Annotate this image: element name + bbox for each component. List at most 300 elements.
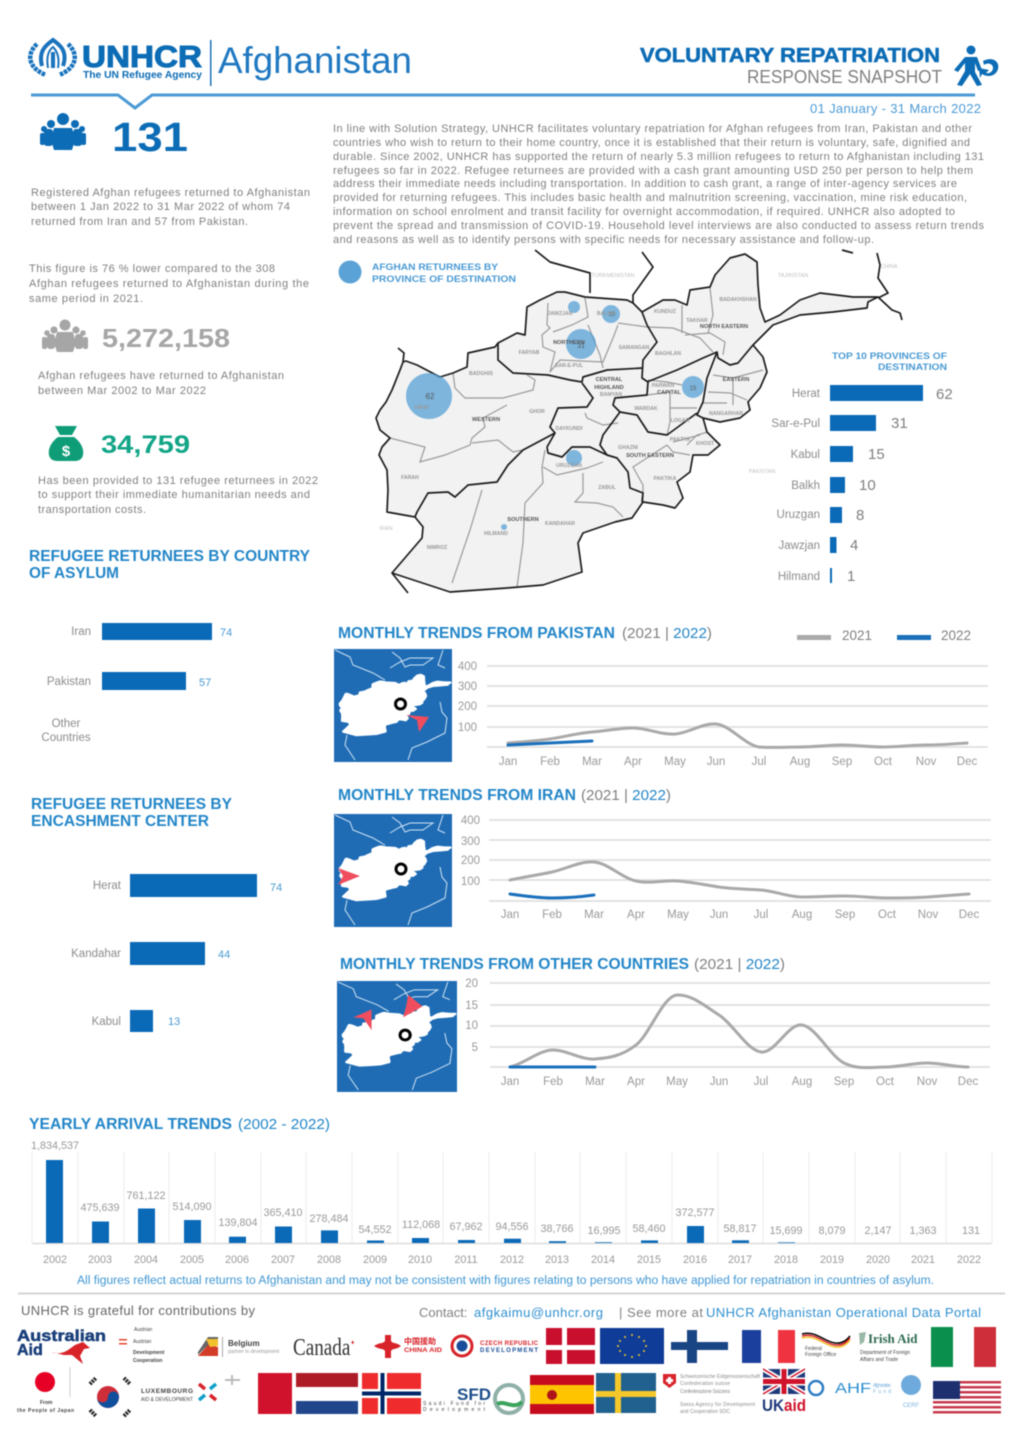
bar chart: returnees by country of asylum: Iran	[71, 626, 91, 638]
region and province labels	[379, 264, 898, 551]
footer: contact and portal links	[419, 1305, 981, 1320]
bar chart: yearly arrivals: 2012	[500, 1254, 524, 1266]
icon: money bag: $	[62, 443, 71, 460]
text block: year on year comparison: Afghan refugees returned to Afghanistan during the	[29, 278, 309, 290]
logo: Luxembourg: LUXEMBOURG	[141, 1388, 193, 1395]
note: data caveat: All figures reflect actual returns to Afghanistan and may not be consistent with figures relating to persons who have applied for repatriation in countries of asylum.	[77, 1275, 934, 1287]
line chart: Pakistan monthly	[458, 661, 988, 768]
bar chart: yearly arrivals: 2008	[317, 1254, 341, 1266]
line chart: other countries monthly: Nov	[917, 1076, 937, 1088]
line chart: Pakistan monthly: Dec	[957, 756, 977, 768]
line chart: Iran monthly: Dec	[959, 909, 979, 921]
line chart: Iran monthly: 400	[461, 815, 480, 827]
map: Afghan returnees by province: 10	[609, 312, 616, 318]
line chart: Pakistan monthly: 100	[458, 722, 477, 734]
logo: Irish Aid: Irish Aid	[868, 1331, 918, 1346]
heading: trends from Pakistan: (2021 | 2022)	[622, 626, 712, 642]
region and province labels: SAMANGAN	[619, 345, 650, 351]
footer: contact and portal links: UNHCR Afghanistan Operational Data Portal	[706, 1305, 981, 1320]
line chart: Iran monthly: 300	[461, 836, 480, 848]
key figure: 131 returnees: 131	[112, 114, 188, 160]
text block: intro paragraph: refugees so far in 2022. Refugee returnees are provided with a cash grant amounting USD 250 per person to help them	[333, 165, 973, 177]
region and province labels: NANGARHAR	[709, 411, 743, 417]
line chart: Pakistan monthly: 400	[458, 661, 477, 673]
province bubbles	[406, 301, 704, 530]
region and province labels: KANDAHAR	[545, 521, 575, 527]
icon: walking person with return arrow	[954, 46, 998, 86]
logo: Irish Aid: Department of Foreign	[860, 1350, 910, 1356]
icon: people group (grey)	[42, 320, 88, 352]
bar chart: top provinces of destination: 62	[936, 386, 953, 403]
flag: Norway	[362, 1373, 421, 1414]
region and province labels: DAYKUNDI	[556, 426, 583, 432]
line chart: other countries monthly: Mar	[585, 1076, 605, 1088]
line chart: other countries monthly: 20	[465, 978, 478, 990]
chart legend: 2022	[941, 628, 971, 643]
bar chart: yearly arrivals: 139,804	[218, 1217, 258, 1229]
line chart: other countries monthly: Jul	[754, 1076, 768, 1088]
flag: Denmark	[546, 1328, 595, 1364]
footer: contributions heading: UNHCR is grateful for contributions by	[21, 1303, 256, 1318]
region and province labels: GHAZNI	[618, 445, 638, 451]
logo: Switzerland	[663, 1374, 761, 1415]
bar chart: yearly arrivals: 2,147	[864, 1225, 892, 1237]
text block: intro paragraph	[333, 123, 984, 246]
footer: contact and portal links: Contact:	[419, 1305, 467, 1320]
icon: UNHCR emblem	[30, 40, 75, 75]
region and province labels: TAJIKISTAN	[778, 273, 808, 279]
chart legend	[797, 628, 971, 643]
logo: China aid	[374, 1335, 443, 1358]
logo: Japan	[17, 1367, 74, 1414]
region and province labels: PARWAN	[652, 383, 675, 389]
heading: returnees by encashment center: REFUGEE RETURNEES BY	[31, 796, 233, 813]
line chart: Pakistan monthly: Oct	[874, 756, 893, 768]
bar chart: yearly arrivals: 2007	[271, 1254, 295, 1266]
bar chart: yearly arrivals: 2018	[774, 1254, 798, 1266]
line chart: other countries monthly: Feb	[543, 1076, 563, 1088]
bar chart: returnees by encashment center: Kabul	[92, 1016, 121, 1028]
bar chart: top provinces of destination	[771, 351, 953, 585]
text block: intro paragraph: and reasons as well as to identify persons with specific needs for necessary assistance and follow-up.	[333, 234, 874, 246]
logo: Austrian Development Cooperation: Cooperation	[133, 1358, 162, 1364]
logo: Japan: From	[40, 1400, 53, 1406]
region and province labels: HILMAND	[484, 531, 508, 537]
bar chart: returnees by country of asylum: Other	[52, 718, 81, 730]
bar chart: yearly arrivals: 2010	[408, 1254, 432, 1266]
line chart: Pakistan monthly: 200	[458, 701, 477, 713]
region and province labels: EASTERN	[723, 377, 749, 383]
flag: Netherlands	[296, 1373, 358, 1414]
region and province labels: IRAN	[379, 526, 393, 532]
line chart: other countries monthly: Jan	[501, 1076, 519, 1088]
region and province labels: NORTHERN	[553, 340, 585, 346]
line chart: Iran monthly: 200	[461, 855, 480, 867]
logo: Canada: ✦	[350, 1339, 355, 1347]
donor logos row 1	[17, 1327, 996, 1367]
text block: cash grant description: to support their immediate humanitarian needs and	[38, 489, 310, 501]
bar chart: yearly arrivals: 278,484	[309, 1213, 349, 1225]
region and province labels: BALKH	[597, 311, 615, 317]
bar chart: yearly arrivals: 58,460	[632, 1223, 666, 1235]
logo: UK aid	[762, 1369, 806, 1415]
bar chart: yearly arrivals: 2022	[957, 1254, 981, 1266]
bar chart: top provinces of destination: Uruzgan	[777, 509, 820, 521]
divider	[210, 40, 212, 86]
region and province labels: SAR-E-PUL	[555, 363, 584, 369]
line chart: Pakistan monthly: May	[664, 756, 686, 768]
map: Afghan returnees by province: 31	[577, 343, 585, 350]
line chart: Pakistan monthly: Jun	[707, 756, 725, 768]
logo: Belgium: Belgium	[228, 1339, 260, 1348]
region and province labels: BADGHIS	[469, 371, 494, 377]
logo: humanitarian agency: CZECH REPUBLIC	[480, 1341, 539, 1347]
logo: Austrian Development Cooperation: Development	[133, 1350, 165, 1356]
bar chart: returnees by encashment center: 74	[270, 882, 282, 894]
bar chart: returnees by country of asylum	[41, 623, 232, 744]
logo: Australian Aid	[17, 1328, 106, 1364]
region and province labels: LOGAR	[671, 418, 690, 424]
bar chart: returnees by encashment center: Kandahar	[71, 948, 121, 960]
region and province labels: ZABUL	[598, 485, 617, 491]
logo: Saudi Fund for Development: Development	[423, 1407, 486, 1413]
logo: Saudi Fund for Development: SFD	[457, 1385, 491, 1404]
flag: European Union	[600, 1328, 664, 1364]
bar chart: top provinces of destination: Jawzjan	[778, 540, 820, 552]
heading: trends from Pakistan: MONTHLY TRENDS FROM PAKISTAN	[338, 625, 615, 642]
region and province labels: NIMROZ	[427, 545, 448, 551]
line chart: Pakistan monthly: Jan	[499, 756, 517, 768]
logo: Germany: Foreign Office	[805, 1352, 837, 1358]
line chart: Iran monthly: Oct	[878, 909, 897, 921]
bar chart: yearly arrivals: 2013	[545, 1254, 569, 1266]
heading: top provinces	[832, 351, 947, 373]
heading: yearly arrival trends: (2002 - 2022)	[238, 1117, 330, 1133]
bar chart: top provinces of destination: 31	[891, 415, 908, 432]
region and province labels: JAWZJAN	[548, 311, 573, 317]
text block: total returns description	[38, 370, 284, 397]
line chart: Iran monthly: Jan	[501, 909, 519, 921]
heading: returnees by country of asylum: REFUGEE RETURNEES BY COUNTRY	[29, 548, 311, 565]
line chart: Pakistan monthly: Apr	[624, 756, 642, 768]
line chart: other countries monthly: Oct	[876, 1076, 895, 1088]
region and province labels: HIGHLAND	[594, 385, 624, 391]
heading: top provinces: TOP 10 PROVINCES OF	[832, 351, 947, 362]
logo: Switzerland: Schweizerische Eidgenossenschaft	[680, 1374, 761, 1380]
logo: Switzerland: Swiss Agency for Development	[680, 1402, 756, 1408]
bar chart: yearly arrivals: 67,962	[449, 1221, 483, 1233]
donor logos row 2	[17, 1367, 1001, 1416]
text block: returnees description: returned from Iran and 57 from Pakistan.	[31, 216, 248, 228]
region and province labels: BAMYAN	[600, 392, 622, 398]
logo: Germany: Federal	[805, 1346, 822, 1352]
bar chart: top provinces of destination: Kabul	[791, 449, 820, 461]
line chart: Iran monthly	[461, 815, 991, 921]
heading: voluntary repatriation: VOLUNTARY REPATRIATION	[640, 45, 940, 67]
bar chart: top provinces of destination: 10	[859, 477, 876, 494]
logo: Saudi Fund for Development	[423, 1385, 523, 1413]
flag: France	[742, 1330, 795, 1363]
heading: yearly arrival trends: YEARLY ARRIVAL TRENDS	[29, 1116, 232, 1133]
heading: trends from Iran: (2021 | 2022)	[581, 788, 671, 804]
bar chart: yearly arrivals: 112,068	[402, 1219, 440, 1231]
region and province labels: CAPITAL	[657, 390, 681, 396]
bar chart: yearly arrivals: 2005	[180, 1254, 204, 1266]
region and province labels: CHINA	[880, 264, 898, 270]
logo: Switzerland: Confederazione Svizzera	[680, 1389, 730, 1395]
line chart: Iran monthly: Jul	[754, 909, 768, 921]
line chart: other countries monthly: Apr	[627, 1076, 645, 1088]
logo: UN pooled funds: CERF	[903, 1403, 919, 1409]
bar chart: top provinces of destination: 8	[856, 507, 864, 524]
bar chart: top provinces of destination: 1	[847, 568, 855, 585]
inset map: other countries routes	[337, 981, 457, 1092]
logo: Belgium	[198, 1337, 280, 1357]
text block: intro paragraph: provided for returning refugees. This includes basic health and malnutrition screening, vaccination, mine risk education,	[333, 192, 967, 204]
text block: year on year comparison: This figure is 76 % lower compared to the 308	[29, 263, 275, 275]
logo: UN pooled funds	[809, 1375, 921, 1409]
logo: Irish Aid	[859, 1331, 918, 1363]
text block: total returns description: between Mar 2002 to Mar 2022	[38, 385, 206, 397]
line chart: other countries monthly: Aug	[792, 1076, 812, 1088]
bar chart: yearly arrivals: 2003	[88, 1254, 112, 1266]
text block: year on year comparison: same period in 2021.	[29, 293, 143, 305]
map legend: AFGHAN RETURNEES BY	[372, 262, 499, 273]
heading: top provinces: DESTINATION	[878, 362, 947, 373]
bar chart: yearly arrivals: 1,834,537	[31, 1140, 79, 1152]
title: Afghanistan: Afghanistan	[218, 40, 412, 81]
heading: yearly arrival trends	[29, 1116, 330, 1133]
heading: returnees by country of asylum: OF ASYLUM	[29, 565, 119, 582]
logo: Australian Aid: Aid	[17, 1342, 43, 1359]
heading: returnees by country of asylum	[29, 548, 311, 582]
text block: intro paragraph: In line with Solution Strategy, UNHCR facilitates voluntary repatriation for Afghan refugees from Iran, Pakistan and other	[333, 123, 972, 135]
text block: cash grant description	[38, 475, 318, 516]
bar chart: yearly arrivals: 2014	[591, 1254, 615, 1266]
tagline: The UN Refugee Agency	[83, 70, 202, 81]
region and province labels: PAKTYA	[670, 437, 690, 443]
logo: Switzerland: and Cooperation SDC	[680, 1409, 730, 1415]
bar chart: yearly arrivals: 8,079	[818, 1225, 846, 1237]
flag: red panel	[258, 1373, 292, 1414]
region and province labels: URUZGAN	[556, 463, 582, 469]
bar chart: top provinces of destination: Hilmand	[778, 571, 820, 583]
flag: Italy	[931, 1327, 996, 1367]
line chart: other countries monthly	[465, 978, 990, 1088]
flag: South Korea	[90, 1378, 130, 1416]
bar chart: yearly arrivals: 2009	[363, 1254, 387, 1266]
bar chart: returnees by encashment center: 44	[218, 949, 230, 961]
bar chart: top provinces of destination: Balkh	[791, 480, 820, 492]
region and province labels: KHOST	[696, 441, 715, 447]
footer: contact and portal links: afgkaimu@unhcr.org	[474, 1305, 603, 1320]
text block: cash grant description: transportation costs.	[38, 504, 146, 516]
line chart: other countries monthly: Sep	[834, 1076, 854, 1088]
logo: Canada: Canada	[293, 1335, 365, 1361]
line chart: Iran monthly: Mar	[584, 909, 604, 921]
icon: people group (blue)	[40, 113, 86, 150]
bar chart: yearly arrivals: 2011	[454, 1254, 478, 1266]
region and province labels: PAKISTAN	[749, 469, 775, 475]
bar chart: yearly arrivals: 16,995	[587, 1225, 621, 1237]
bar chart: returnees by encashment center	[71, 874, 282, 1032]
logo: Austrian Development Cooperation: Austrian	[133, 1339, 152, 1345]
line chart: Iran monthly: Apr	[627, 909, 645, 921]
line chart: Iran monthly: Sep	[835, 909, 855, 921]
bar chart: returnees by country of asylum: 74	[220, 627, 232, 639]
logo: humanitarian agency: DEVELOPMENT	[480, 1348, 538, 1354]
header: UNHCR logo	[30, 39, 202, 81]
region and province labels: BADAKHSHAN	[719, 297, 757, 303]
region and province labels: GHOR	[529, 409, 545, 415]
bar chart: top provinces of destination: 4	[850, 537, 858, 554]
text block: intro paragraph: information on school enrolment and transit facility for overnight accommodation, if required. UNHCR also adopted to	[333, 206, 955, 218]
text block: cash grant description: Has been provided to 131 refugee returnees in 2022	[38, 475, 318, 487]
heading: trends from Iran: MONTHLY TRENDS FROM IRAN	[338, 787, 576, 804]
map: Afghan returnees by province	[376, 250, 902, 593]
line chart: Iran monthly: Nov	[918, 909, 938, 921]
line chart: Pakistan monthly: Nov	[916, 756, 936, 768]
bar chart: yearly arrivals: 15,699	[769, 1225, 803, 1237]
logo: UN pooled funds: Fund	[873, 1389, 891, 1395]
key figure: cash grant: 34,759	[101, 431, 190, 459]
line chart: Pakistan monthly: Jul	[752, 756, 766, 768]
logo: Austrian Development Cooperation: Austrian	[134, 1327, 153, 1333]
logo: Australian Aid: Australian	[17, 1328, 106, 1345]
bar chart: returnees by country of asylum: 57	[199, 677, 211, 689]
bar chart: yearly arrivals: 2019	[820, 1254, 844, 1266]
region and province labels: FARYAB	[519, 350, 540, 356]
region and province labels: CENTRAL	[596, 377, 623, 383]
footer: contact and portal links: | See more at	[619, 1305, 703, 1320]
line chart: other countries monthly: May	[666, 1076, 688, 1088]
text block: returnees description: between 1 Jan 2022 to 31 Mar 2022 of whom 74	[31, 201, 290, 213]
line chart: Iran monthly: 100	[461, 876, 480, 888]
region and province labels: KUNDUZ	[654, 309, 677, 315]
region and province labels: SOUTHERN	[507, 517, 539, 523]
header rule with notch	[31, 95, 975, 108]
bar chart: yearly arrivals: 372,577	[675, 1207, 715, 1219]
bar chart: yearly arrivals: 2021	[911, 1254, 935, 1266]
bar chart: yearly arrivals: 54,552	[358, 1224, 392, 1236]
bar chart: yearly arrivals: 94,556	[495, 1221, 529, 1233]
text block: intro paragraph: durable. Since 2002, UNHCR has supported the return of nearly 5.3 million refugees to return to Afghanistan including 131	[333, 151, 984, 163]
line chart: Iran monthly: Jun	[710, 909, 728, 921]
logo: humanitarian agency	[452, 1336, 539, 1356]
line chart: Pakistan monthly: Aug	[790, 756, 810, 768]
bar chart: yearly arrivals: 761,122	[126, 1190, 166, 1202]
text block: intro paragraph: prevent the spread and transmission of COVID-19. Household level interviews are also conducted to assess return trends	[333, 220, 984, 232]
bar chart: yearly arrivals: 38,766	[540, 1223, 574, 1235]
logo: Luxembourg: AID & DEVELOPMENT	[141, 1397, 193, 1403]
date range: 01 January - 31 March 2022	[810, 101, 981, 116]
region and province labels: SOUTH EASTERN	[626, 453, 674, 459]
bar chart: yearly arrivals: 2004	[134, 1254, 158, 1266]
logo: Switzerland: Confederation suisse	[680, 1381, 730, 1387]
region and province labels: BAGHLAN	[655, 351, 681, 357]
bar chart: returnees by country of asylum: Pakistan	[47, 676, 91, 688]
line chart: Pakistan monthly: Feb	[540, 756, 560, 768]
region and province labels: HIRAT	[414, 405, 431, 411]
bar chart: yearly arrivals: 1,363	[909, 1225, 937, 1237]
line chart: other countries monthly: 10	[465, 1020, 478, 1032]
bar chart: yearly arrivals: 475,639	[80, 1202, 120, 1214]
text block: intro paragraph: address their immediate needs including transportation. In addition to cash grant, a range of inter-agency services are	[333, 178, 957, 190]
footer rule	[18, 1292, 1005, 1294]
heading: trends from other countries: (2021 | 2022)	[694, 957, 785, 973]
bar chart: yearly arrivals: 2016	[683, 1254, 707, 1266]
bar chart: top provinces of destination: 15	[868, 446, 885, 463]
map: Afghan returnees by province: 15	[690, 386, 697, 392]
bar chart: top provinces of destination: Sar-e-Pul	[771, 418, 820, 430]
line chart: Pakistan monthly: 300	[458, 681, 477, 693]
key figure: total returns: 5,272,158	[102, 323, 230, 353]
logo: UK aid: UKaid	[762, 1396, 806, 1415]
logo: Irish Aid: Affairs and Trade	[860, 1357, 898, 1363]
logo: UN pooled funds: AHF	[835, 1380, 871, 1397]
line chart: Iran monthly: Feb	[542, 909, 562, 921]
text block: returnees description: Registered Afghan refugees returned to Afghanistan	[31, 187, 310, 199]
text block: year on year comparison	[29, 263, 309, 305]
flag: Sweden	[596, 1373, 656, 1413]
flag: USA	[933, 1381, 1001, 1414]
line chart: Iran monthly: Aug	[792, 909, 812, 921]
bar chart: yearly arrivals: 131	[962, 1225, 980, 1237]
line chart: Pakistan monthly: Sep	[832, 756, 852, 768]
bar chart: returnees by encashment center: 13	[168, 1016, 180, 1028]
logo: China aid: 中国援助	[404, 1336, 436, 1346]
logo: Luxembourg	[141, 1375, 240, 1403]
text block: returnees description	[31, 187, 310, 228]
inset map: Pakistan route	[334, 649, 452, 762]
bar chart: top provinces of destination: Herat	[792, 388, 821, 400]
line chart: other countries monthly: Dec	[958, 1076, 978, 1088]
text block: total returns description: Afghan refugees have returned to Afghanistan	[38, 370, 284, 382]
bar chart: yearly arrivals: 2017	[728, 1254, 752, 1266]
bar chart: yearly arrivals: 2002	[43, 1254, 67, 1266]
line chart: other countries monthly: 15	[465, 1000, 478, 1012]
logo: Austrian Development Cooperation	[119, 1327, 165, 1364]
region and province labels: TURKMENISTAN	[592, 273, 635, 279]
region and province labels: WARDAK	[634, 406, 658, 412]
bar chart: yearly arrivals: 514,090	[172, 1201, 212, 1213]
heading: returnees by encashment center: ENCASHMENT CENTER	[31, 813, 209, 830]
text block: intro paragraph: countries who wish to return to their home country, once it is established that their return is voluntary, safe, dignified and	[333, 137, 970, 149]
bubble values: 62	[426, 392, 435, 401]
logo: Germany	[802, 1333, 850, 1358]
inset map: Iran route	[334, 814, 452, 927]
heading: trends from other countries: MONTHLY TRENDS FROM OTHER COUNTRIES	[340, 956, 689, 973]
map legend: PROVINCE OF DESTINATION	[372, 274, 516, 285]
region and province labels: NORTH EASTERN	[700, 324, 748, 330]
chart legend: 2021	[842, 628, 872, 643]
subheading: response snapshot: RESPONSE SNAPSHOT	[747, 67, 942, 87]
heading: returnees by encashment center	[31, 796, 233, 830]
bar chart: returnees by encashment center: Herat	[93, 880, 122, 892]
line chart: other countries monthly: 5	[472, 1042, 478, 1054]
bar chart: yearly arrivals: 365,410	[263, 1207, 303, 1219]
line chart: Pakistan monthly: Mar	[582, 756, 602, 768]
wordmark: UNHCR	[82, 39, 202, 74]
region and province labels: PAKTIKA	[654, 476, 677, 482]
logo: Japan: the People of Japan	[17, 1408, 74, 1414]
bar chart: yearly arrivals: 2020	[866, 1254, 890, 1266]
line chart: Iran monthly: May	[667, 909, 689, 921]
logo: China aid: CHINA AID	[404, 1348, 443, 1354]
bar chart: yearly arrivals: 2006	[225, 1254, 249, 1266]
flag: Finland	[671, 1330, 728, 1363]
bar chart: yearly arrivals: 2015	[637, 1254, 661, 1266]
